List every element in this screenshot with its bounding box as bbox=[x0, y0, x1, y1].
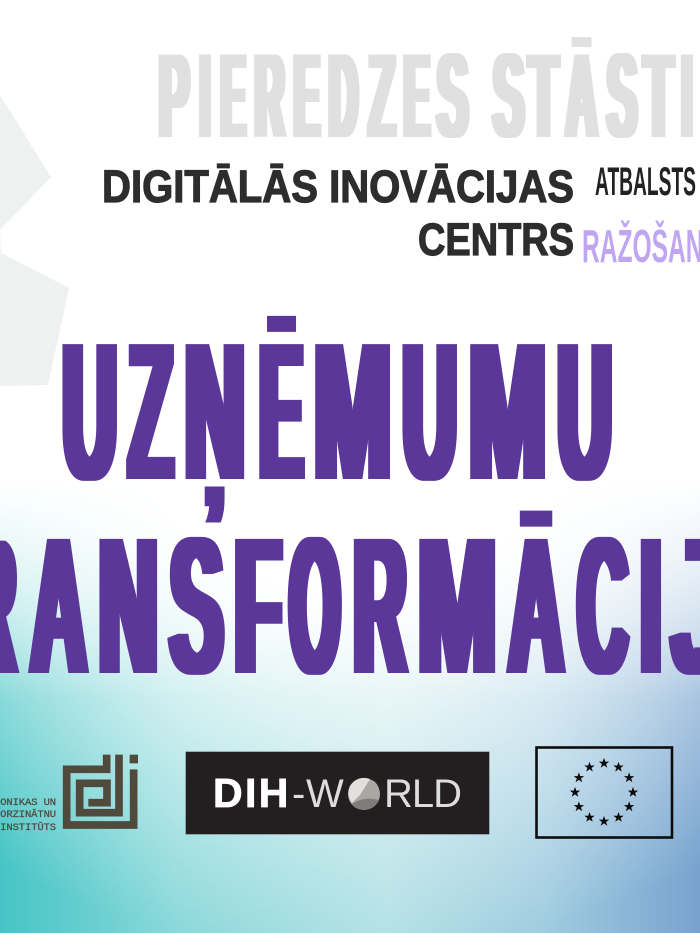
main title line 2: F bbox=[235, 497, 281, 715]
logo wordmark: O bbox=[350, 772, 381, 816]
main title line 2: R bbox=[354, 497, 406, 715]
main title line 1: Ņ bbox=[185, 302, 245, 521]
main title line 1: U bbox=[558, 302, 611, 521]
heading: pieredzes stasti: E bbox=[221, 29, 245, 163]
main title line 1: U bbox=[63, 302, 116, 521]
logo: DIH-WORLD bbox=[186, 752, 489, 834]
logo: EU flag bbox=[536, 748, 672, 838]
logo: EDI institute bbox=[0, 755, 138, 834]
main title line 1: M bbox=[314, 302, 391, 521]
subheading: digital innovation: DIGITĀLĀS INOVĀCIJAS bbox=[102, 161, 574, 212]
logo mark bbox=[67, 755, 138, 825]
logo wordmark: RLD bbox=[384, 772, 461, 816]
logo wordmark: - bbox=[292, 772, 305, 816]
flag outline bbox=[536, 748, 672, 838]
heading: pieredzes stasti: S bbox=[437, 29, 468, 163]
logo text: INSTITŪTS bbox=[0, 821, 56, 834]
heading: pieredzes stasti: T bbox=[528, 29, 557, 163]
decorative grey star shape bbox=[0, 95, 69, 386]
heading: pieredzes stasti: S bbox=[493, 29, 524, 163]
main title line 2: N bbox=[99, 497, 158, 715]
main title line 2: A bbox=[31, 497, 86, 715]
logo wordmark: DIH bbox=[213, 770, 291, 816]
heading: pieredzes stasti: D bbox=[329, 29, 357, 163]
main title line 1: M bbox=[468, 302, 546, 521]
icon: sphere bbox=[348, 778, 380, 810]
subheading: centrs: CENTRS bbox=[418, 214, 574, 265]
main title line 2: S bbox=[170, 497, 223, 715]
main title line 2: I bbox=[641, 497, 661, 715]
main title line 1: U bbox=[403, 302, 456, 521]
heading: pieredzes stasti: R bbox=[255, 29, 284, 163]
logo wordmark: W bbox=[306, 772, 344, 816]
heading: pieredzes stasti: Z bbox=[369, 29, 395, 163]
main title line 2: O bbox=[290, 497, 340, 715]
main title line 2: Ā bbox=[509, 497, 563, 715]
logo background bbox=[186, 752, 489, 834]
heading: pieredzes stasti: I bbox=[200, 29, 210, 163]
heading: pieredzes stasti: S bbox=[607, 29, 637, 163]
heading: pieredzes stasti: E bbox=[294, 29, 319, 163]
main title line 1: Ē bbox=[260, 302, 302, 521]
flag stars bbox=[570, 758, 638, 826]
heading: pieredzes stasti: P bbox=[159, 29, 189, 163]
heading: pieredzes stasti: E bbox=[404, 29, 429, 163]
heading: pieredzes stasti: Ā bbox=[566, 29, 597, 163]
main title line 2: M bbox=[418, 497, 497, 715]
main title line 2: C bbox=[578, 497, 627, 715]
main title line 1: Z bbox=[129, 302, 173, 521]
heading: pieredzes stasti: T bbox=[644, 29, 672, 163]
heading: pieredzes stasti: I bbox=[682, 29, 692, 163]
